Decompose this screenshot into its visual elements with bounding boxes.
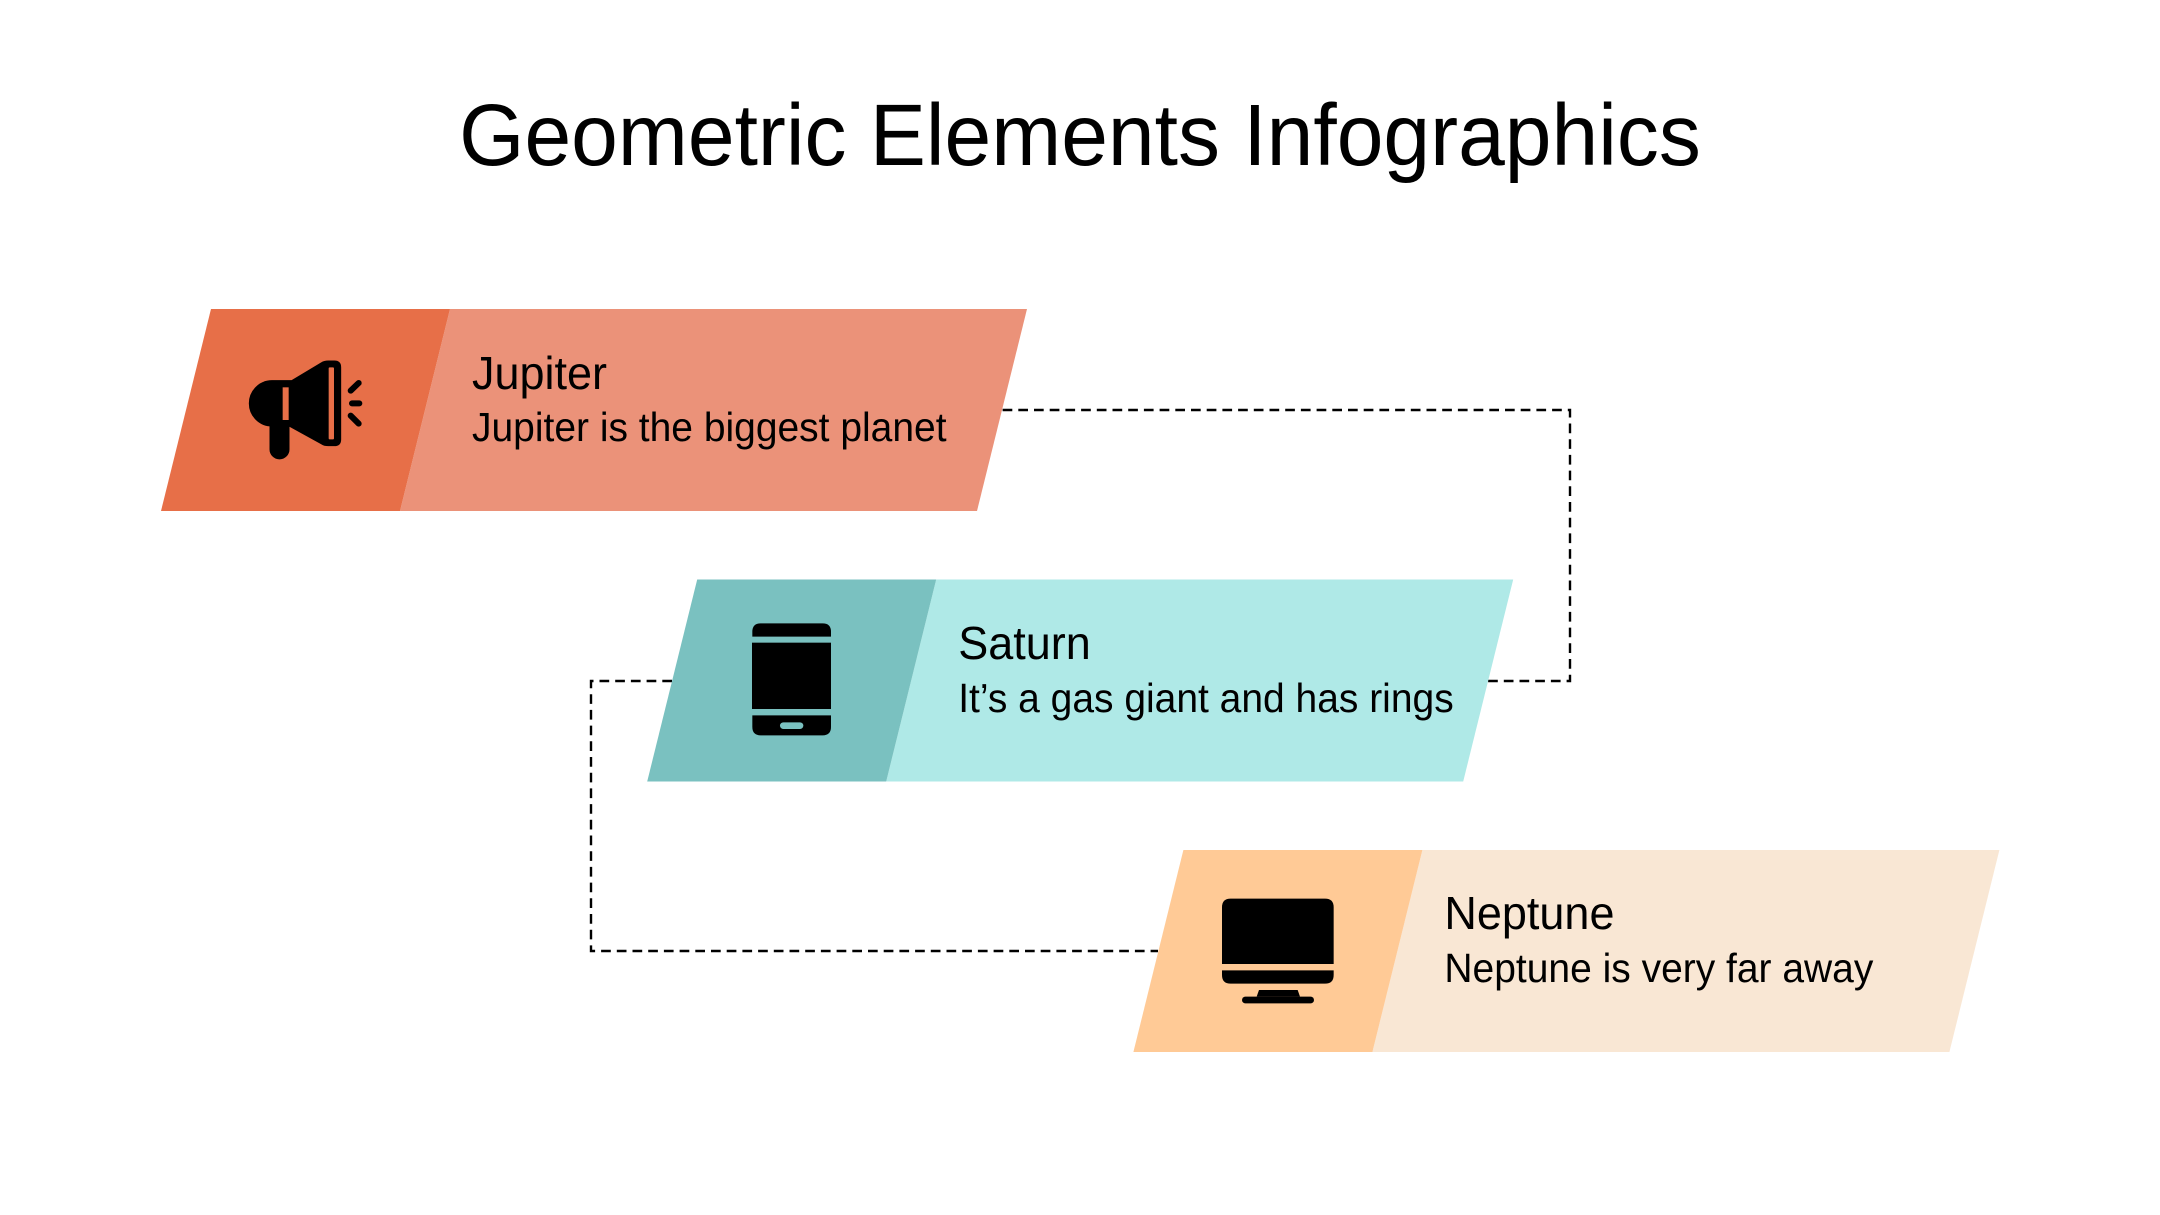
arrow: dashed connector Jupiter to Saturn bbox=[1003, 410, 1570, 681]
heading: Neptune: Neptune bbox=[1444, 886, 1614, 939]
icon: tablet bbox=[752, 623, 831, 735]
icon: megaphone bbox=[249, 361, 359, 459]
arrow: dashed connector Saturn to Neptune bbox=[591, 681, 1158, 951]
text: Saturn description: It’s a gas giant and has rings bbox=[958, 676, 1454, 721]
text panel background bbox=[886, 580, 1513, 782]
icon panel background bbox=[1133, 850, 1422, 1052]
heading: Saturn: Saturn bbox=[958, 616, 1091, 669]
panel: Saturn bbox=[647, 580, 1513, 782]
text panel background bbox=[400, 309, 1027, 511]
panel: Neptune bbox=[1133, 850, 1999, 1052]
panel: Jupiter bbox=[161, 309, 1027, 511]
icon panel background bbox=[161, 309, 450, 511]
text panel background bbox=[1372, 850, 1999, 1052]
text: Jupiter description: Jupiter is the biggest planet bbox=[472, 405, 947, 450]
icon: desktop monitor bbox=[1222, 899, 1334, 1003]
icon panel background bbox=[647, 580, 936, 782]
heading: Jupiter: Jupiter bbox=[472, 346, 607, 399]
title: Geometric Elements Infographics bbox=[459, 87, 1701, 184]
text: Neptune description: Neptune is very far away bbox=[1444, 946, 1873, 991]
